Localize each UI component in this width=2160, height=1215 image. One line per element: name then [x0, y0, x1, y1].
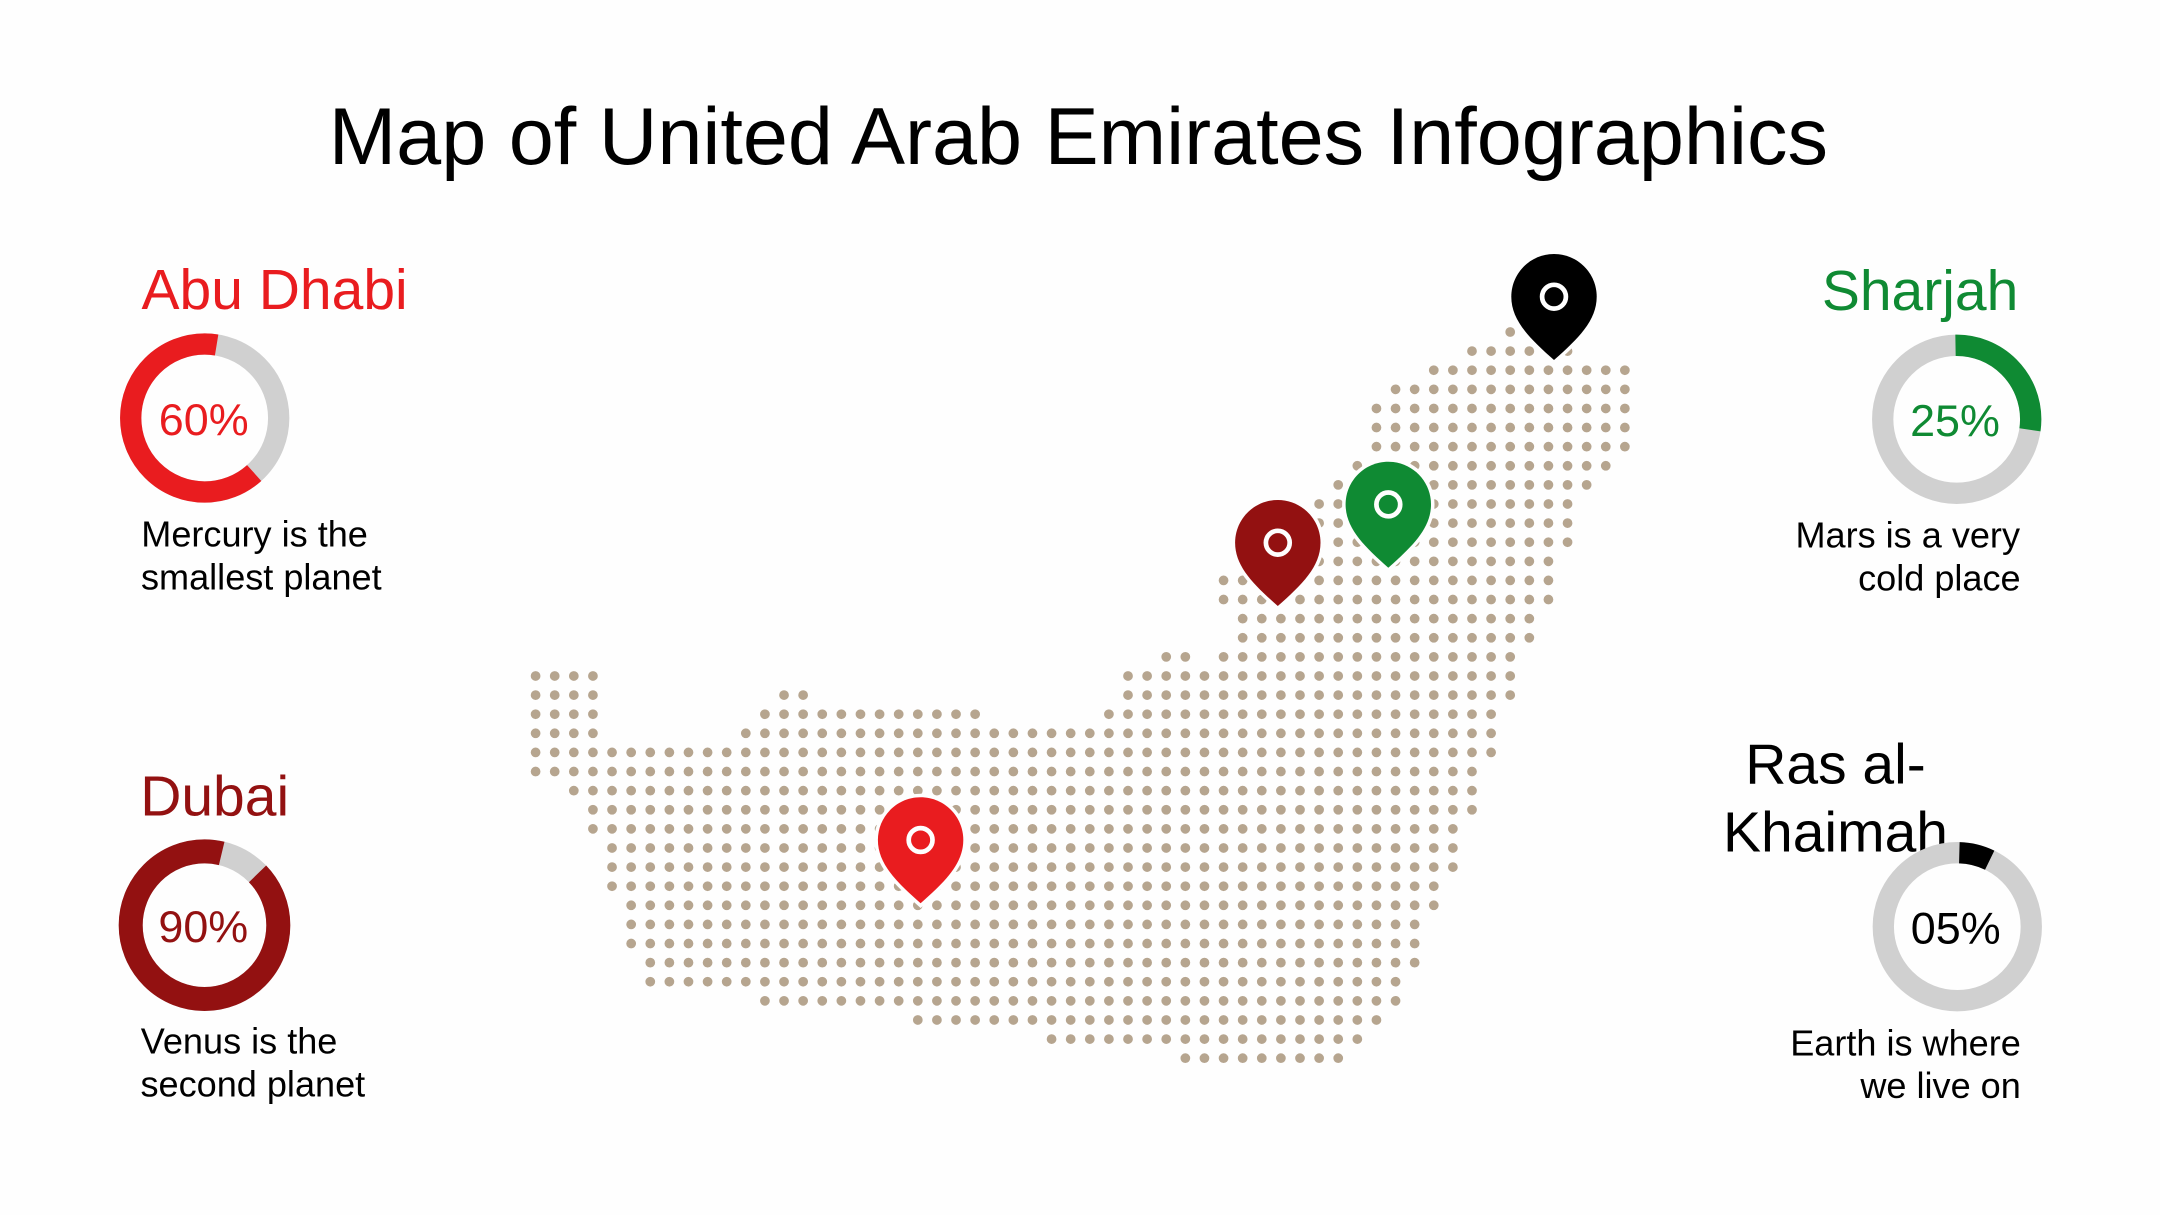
pin: Abu Dhabi (red) — [878, 797, 963, 903]
pin: Dubai (dark red) — [1235, 500, 1320, 606]
description: Dubai: Venus is the — [141, 1020, 337, 1061]
description: Sharjah: Mars is a very — [1795, 514, 2020, 555]
donut chart: 60%: 60% — [159, 394, 249, 445]
panel: Dubai — [131, 765, 365, 1104]
donut chart: 25%: 25% — [1910, 395, 2000, 446]
description: Sharjah: cold place — [1858, 557, 2021, 598]
title: Map of United Arab Emirates Infographics — [329, 92, 1828, 182]
donut chart: 90% — [131, 851, 278, 999]
panel: Sharjah — [1795, 259, 2031, 598]
heading: Sharjah: Sharjah — [1822, 259, 2018, 323]
dotted map of the United Arab Emirates — [536, 332, 1625, 1058]
description: Abu Dhabi: Mercury is the — [141, 514, 368, 555]
heading: Ras al-Khaimah: Ras al- — [1745, 732, 1926, 796]
pin: Ras al-Khaimah (black) — [1511, 254, 1597, 360]
donut chart: 25% — [1883, 345, 2031, 493]
panel: Ras al-Khaimah — [1723, 732, 2031, 1106]
description: Dubai: second planet — [140, 1063, 365, 1104]
donut chart: 05%: 05% — [1911, 902, 2001, 953]
description: Ras al-Khaimah: we live on — [1859, 1065, 2021, 1106]
heading: Abu Dhabi: Abu Dhabi — [142, 258, 408, 322]
description: Ras al-Khaimah: Earth is where — [1790, 1022, 2021, 1063]
donut chart: 90%: 90% — [158, 901, 248, 952]
panel: Abu Dhabi — [131, 258, 408, 597]
heading: Dubai: Dubai — [140, 765, 289, 829]
donut chart: 60% — [131, 344, 279, 492]
pin: Sharjah (green) — [1346, 462, 1431, 568]
description: Abu Dhabi: smallest planet — [141, 556, 382, 597]
heading: Ras al-Khaimah: Khaimah — [1723, 801, 1948, 865]
donut chart: 05% — [1883, 853, 2031, 1001]
